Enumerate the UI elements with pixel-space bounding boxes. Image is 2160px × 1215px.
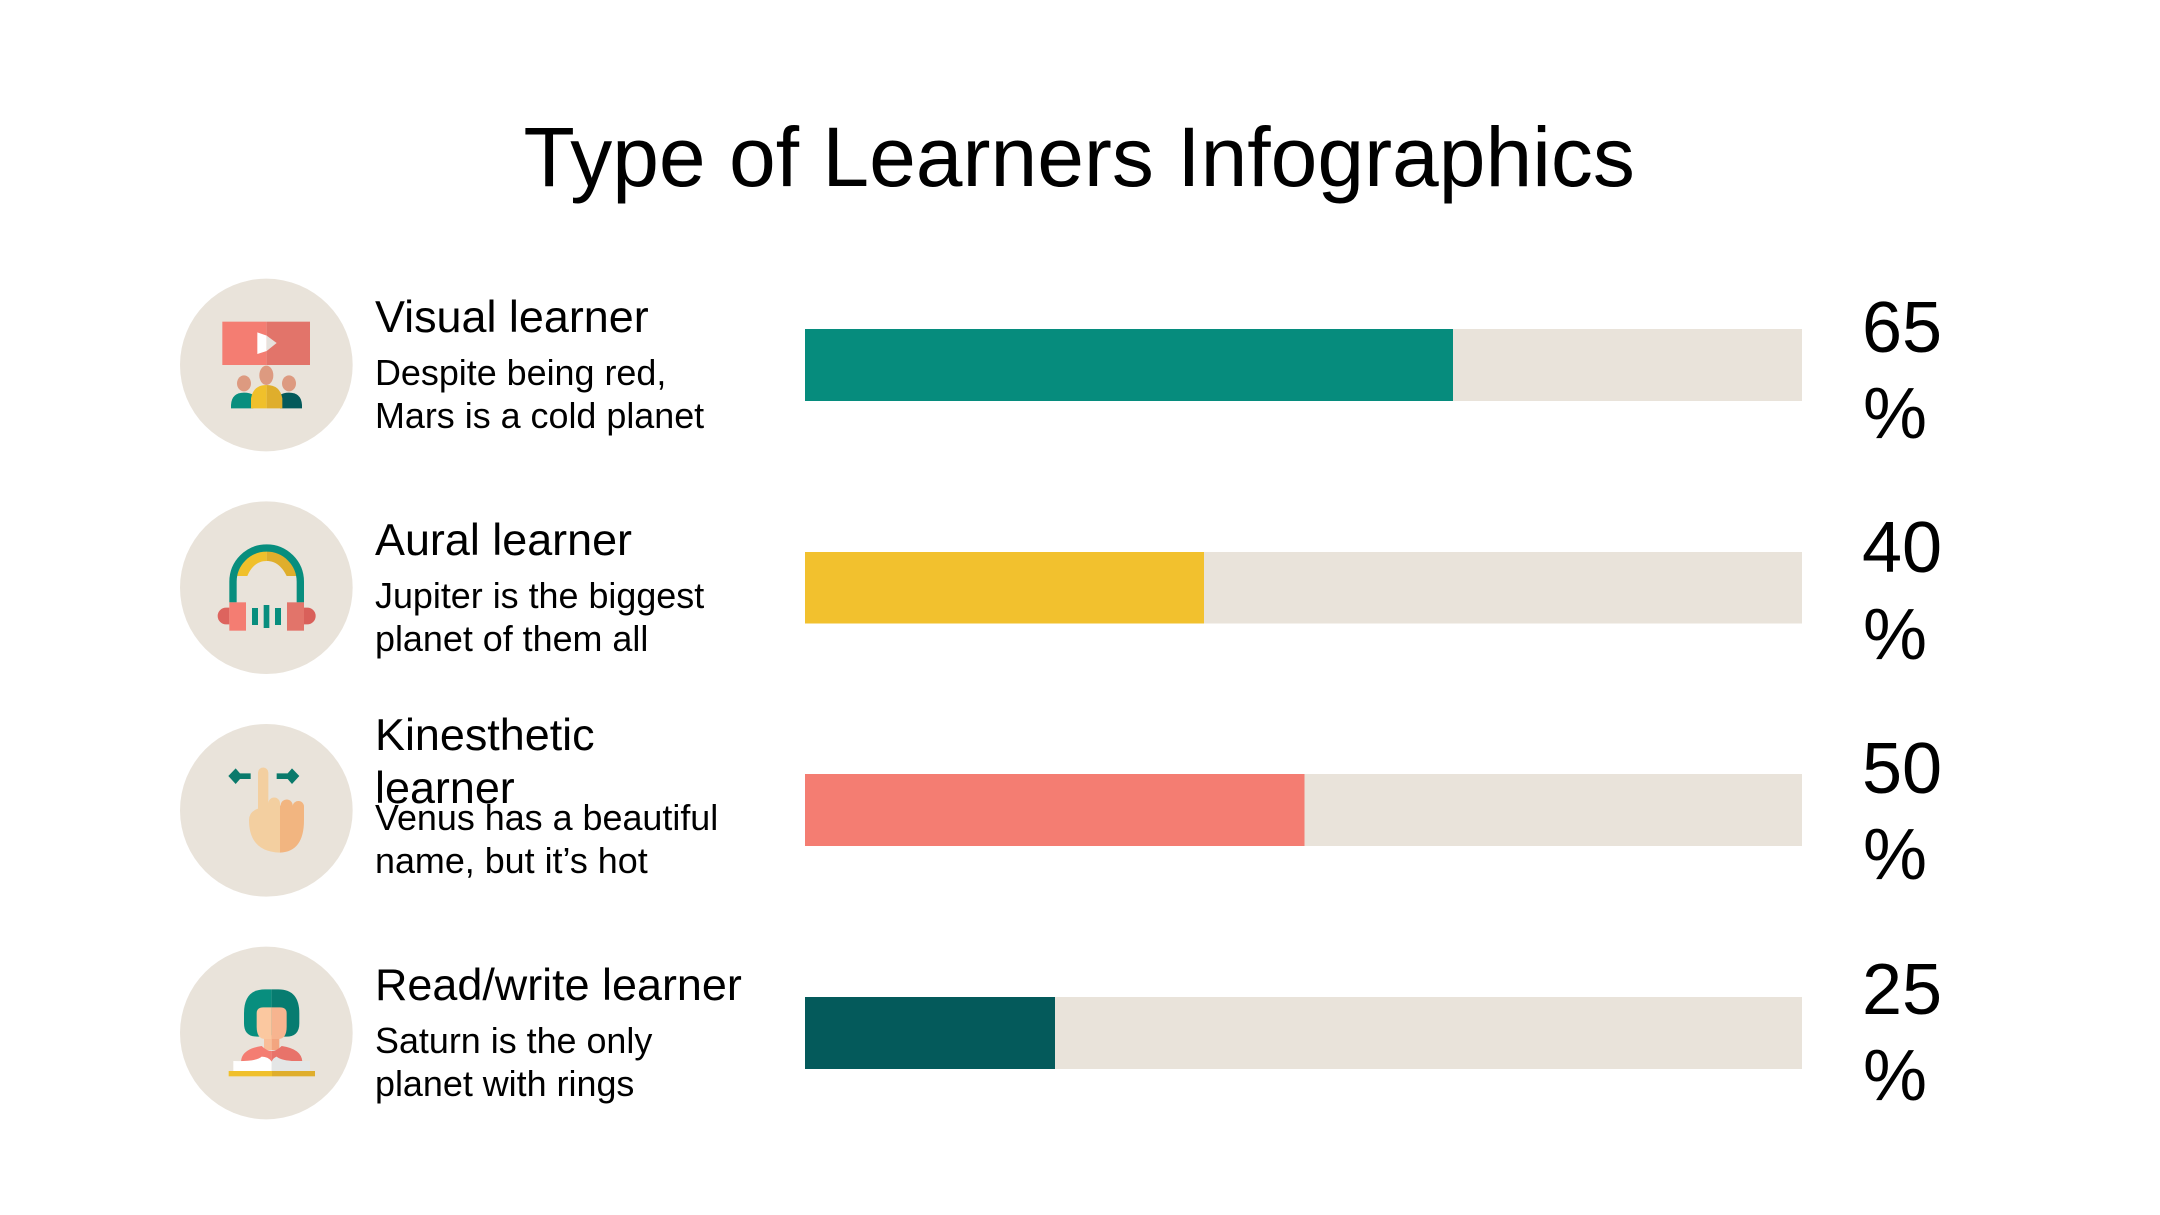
description: visual learner: Mars is a cold planet bbox=[375, 396, 704, 436]
bar chart: 65 percent bbox=[805, 329, 1802, 401]
value: 50 percent: % bbox=[1863, 815, 1927, 895]
description: kinesthetic learner: name, but it’s hot bbox=[375, 841, 648, 881]
title: Type of Learners Infographics bbox=[524, 110, 1635, 204]
heading: kinesthetic learner: learner bbox=[375, 762, 515, 813]
description: read/write learner: planet with rings bbox=[375, 1064, 634, 1104]
panel: kinesthetic learner row bbox=[180, 709, 1942, 897]
value: 40 percent: 40 bbox=[1862, 508, 1942, 588]
bar chart: 40 percent bbox=[805, 552, 1802, 624]
value: 65 percent: 65 bbox=[1862, 288, 1942, 368]
icon: read/write learner, person with open book bbox=[180, 947, 353, 1119]
heading: visual learner: Visual learner bbox=[375, 291, 649, 342]
heading: aural learner: Aural learner bbox=[375, 514, 632, 565]
panel: aural learner row bbox=[180, 501, 1942, 675]
value: 40 percent: % bbox=[1863, 595, 1927, 675]
panel: read/write learner row bbox=[180, 947, 1942, 1119]
description: aural learner: Jupiter is the biggest bbox=[375, 576, 704, 616]
value: 25 percent: % bbox=[1863, 1036, 1927, 1116]
icon: kinesthetic learner, finger swiping bbox=[180, 724, 353, 897]
icon: visual learner, audience watching a video screen bbox=[180, 279, 353, 451]
value: 50 percent: 50 bbox=[1862, 729, 1942, 809]
heading: kinesthetic learner: Kinesthetic bbox=[375, 709, 595, 760]
description: visual learner: Despite being red, bbox=[375, 353, 666, 393]
value: 25 percent: 25 bbox=[1862, 950, 1942, 1030]
value: 65 percent: % bbox=[1863, 374, 1927, 454]
heading: read/write learner: Read/write learner bbox=[375, 959, 742, 1010]
panel: visual learner row bbox=[180, 279, 1942, 454]
bar chart: 25 percent bbox=[805, 997, 1802, 1069]
bar chart: 50 percent bbox=[805, 774, 1802, 846]
description: kinesthetic learner: Venus has a beautiful bbox=[375, 798, 718, 838]
icon: aural learner, headphones bbox=[180, 501, 353, 674]
description: aural learner: planet of them all bbox=[375, 619, 648, 659]
description: read/write learner: Saturn is the only bbox=[375, 1021, 652, 1061]
